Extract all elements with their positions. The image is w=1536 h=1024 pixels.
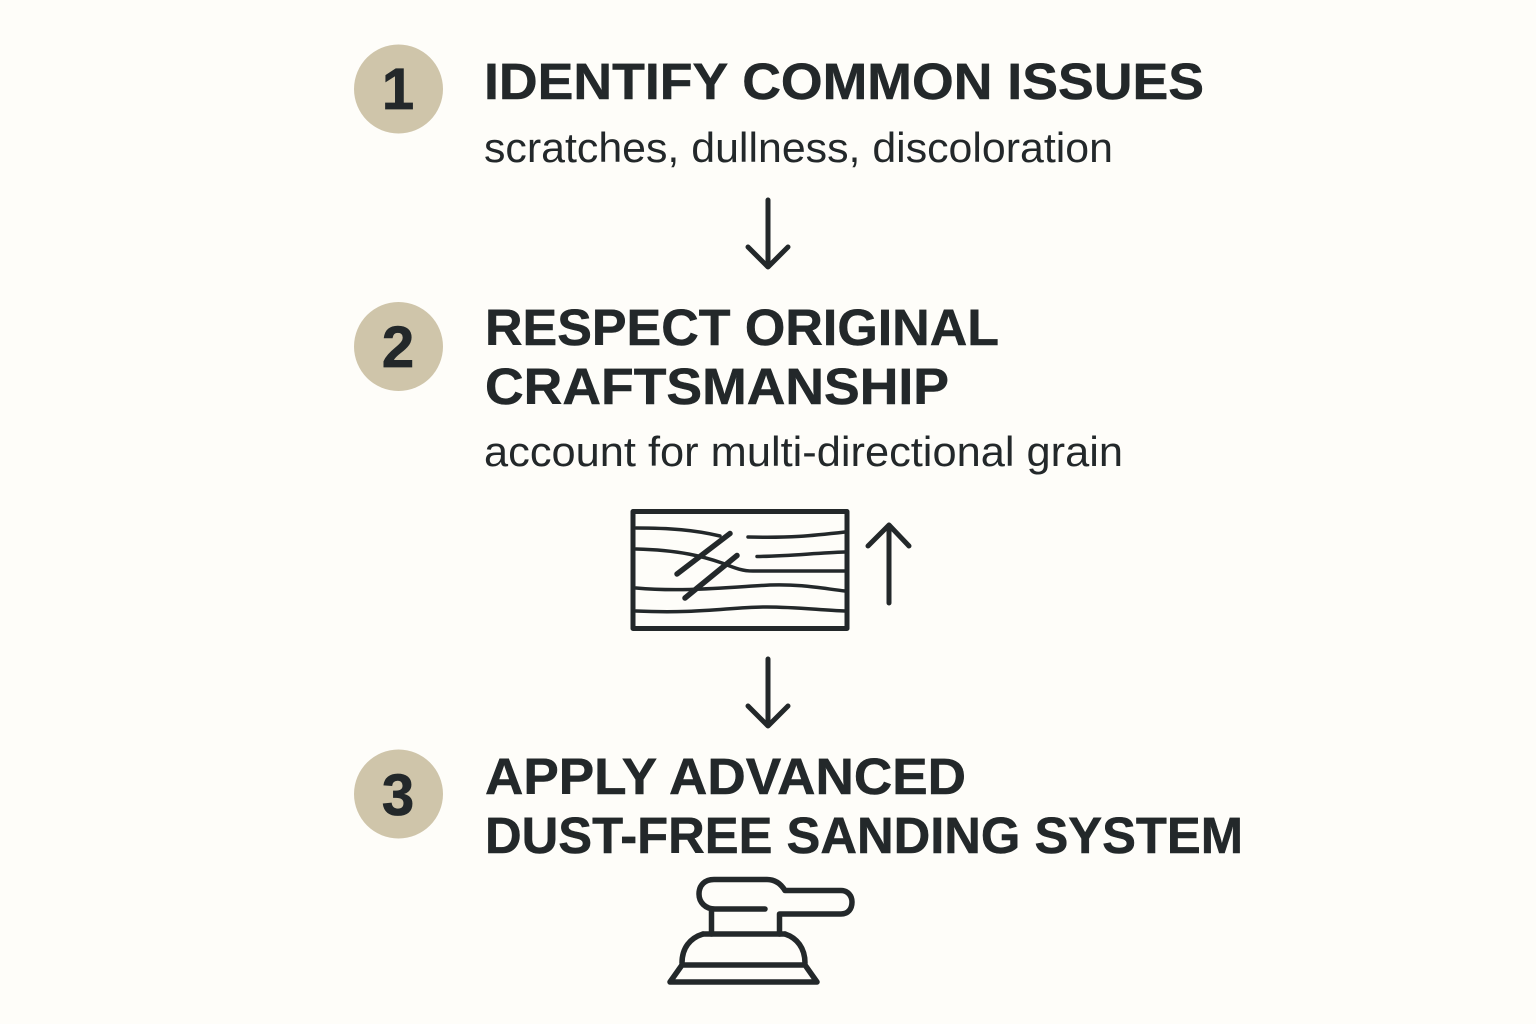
heading: respect original craftsmanship: CRAFTSMANSHIP bbox=[485, 358, 949, 415]
number badge 1 bbox=[354, 44, 443, 134]
arrow: step 1 to step 2 bbox=[748, 200, 788, 267]
icon: orbital sander bbox=[670, 880, 852, 982]
heading: apply advanced dust-free sanding system: DUST-FREE SANDING SYSTEM bbox=[485, 807, 1243, 864]
heading: apply advanced dust-free sanding system bbox=[485, 748, 1243, 864]
arrow: grain direction up bbox=[868, 525, 909, 603]
heading: respect original craftsmanship bbox=[485, 299, 999, 415]
heading: identify common issues: IDENTIFY COMMON ISSUES bbox=[484, 53, 1204, 110]
number badge 1: 1 bbox=[382, 57, 414, 122]
subtext: grain: account for multi-directional grain bbox=[484, 428, 1123, 475]
number badge 2: 2 bbox=[382, 315, 414, 380]
number badge 3 bbox=[354, 750, 443, 838]
heading: respect original craftsmanship: RESPECT ORIGINAL bbox=[485, 299, 999, 356]
step 1 bbox=[354, 44, 1204, 171]
subtext: issues list: scratches, dullness, discoloration bbox=[484, 124, 1113, 171]
icon: wood panel with multi-directional grain bbox=[633, 512, 847, 628]
number badge 2 bbox=[354, 302, 443, 391]
arrow: step 2 to step 3 bbox=[748, 659, 788, 726]
number badge 3: 3 bbox=[382, 763, 414, 828]
heading: apply advanced dust-free sanding system: APPLY ADVANCED bbox=[485, 748, 966, 805]
step 2 bbox=[354, 299, 1123, 475]
step 3 bbox=[354, 748, 1243, 864]
